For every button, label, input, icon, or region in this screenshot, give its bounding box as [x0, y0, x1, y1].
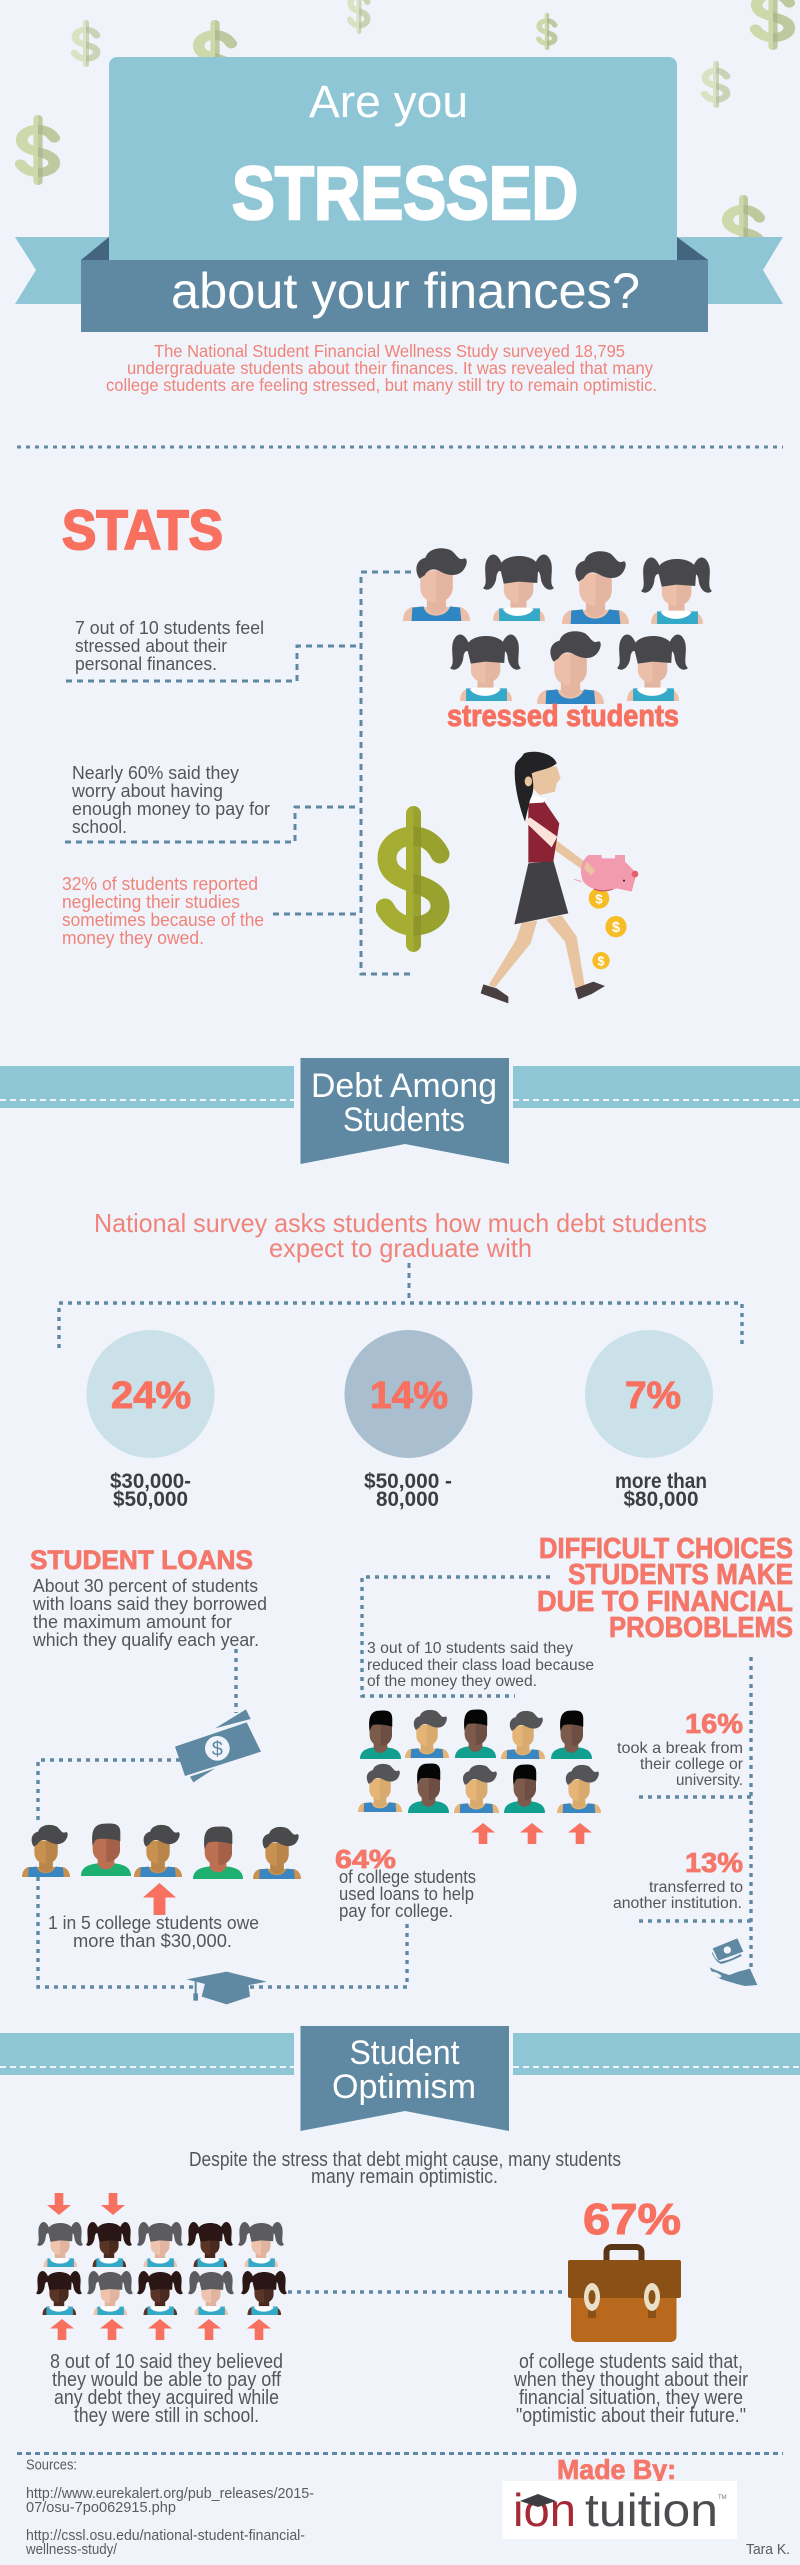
stat: 64%: pay for college.	[339, 1901, 453, 1921]
arrows: class load	[471, 1823, 592, 1844]
skirt	[514, 861, 568, 924]
text: 8 out of 10: any debt they acquired while	[54, 2387, 279, 2409]
stat: 16%: university.	[676, 1772, 743, 1789]
text: 32% neglecting studies: money they owed.	[62, 928, 204, 948]
credit: Tara K.	[746, 2541, 790, 2558]
banner	[300, 2026, 509, 2131]
band left	[0, 2033, 294, 2075]
left fold	[81, 237, 109, 260]
stat: 16%: 16%	[685, 1708, 743, 1739]
text: 32% neglecting studies: 32% of students reported	[62, 874, 258, 894]
text: 32% neglecting studies: sometimes because of the	[62, 910, 264, 930]
text: 3 out of 10	[367, 1640, 594, 1690]
icon: graduation cap	[187, 1972, 267, 2004]
arrows: up	[50, 2319, 271, 2340]
arrows: down	[47, 2193, 125, 2215]
optimism intro: Despite the stress that debt might cause, many students	[189, 2149, 621, 2171]
text: 7 out of 10: personal finances.	[75, 654, 217, 674]
icons: class load students	[358, 1709, 601, 1813]
illustration: girl with piggy bank	[481, 752, 638, 1003]
text: about 30 percent: with loans said they borrowed	[32, 1594, 267, 1614]
logo: iontuition: tuition	[585, 2484, 718, 2536]
icon: big dollar sign	[385, 806, 440, 952]
stat: 14%: 14%	[370, 1375, 448, 1417]
coins: $	[612, 920, 620, 936]
coins: $	[597, 955, 605, 969]
heading: stats: STATS	[62, 498, 223, 561]
text: optimistic about their future	[513, 2351, 748, 2427]
stat: 64%	[335, 1844, 476, 1921]
text: about 30 percent: About 30 percent of students	[33, 1576, 258, 1596]
logo cap	[520, 2494, 556, 2507]
sources: http://www.eurekalert.org/pub_releases/2015-	[26, 2485, 314, 2502]
icons: loan students row	[22, 1824, 301, 1879]
legs	[489, 921, 537, 987]
text: 32% neglecting studies	[62, 874, 264, 948]
stat: 64%: 64%	[335, 1844, 396, 1874]
stat: 13%	[613, 1847, 743, 1912]
banner title: Debt Among	[311, 1067, 497, 1105]
text: optimistic about their future: financial situation, they were	[519, 2387, 743, 2409]
label: stressed students: stressed students	[447, 698, 679, 733]
sleeve	[525, 817, 557, 847]
text: nearly 60%: Nearly 60% said they	[72, 763, 239, 783]
text: 3 out of 10: of the money they owed.	[367, 1673, 537, 1690]
icon: money	[175, 1709, 261, 1782]
hair	[515, 752, 557, 822]
stat: 16%: took a break from	[617, 1740, 743, 1757]
text: optimistic about their future: "optimistic about their future."	[516, 2405, 746, 2427]
section band: debt among students	[0, 1058, 800, 1164]
logo: iontuition	[502, 2481, 737, 2539]
title line 1: Are you	[309, 76, 468, 127]
logo: iontuition: TM	[718, 2495, 727, 2501]
text: 8 out of 10: they would be able to pay off	[52, 2369, 281, 2391]
text: optimistic about their future: of college students said that,	[519, 2351, 743, 2373]
text: 7 out of 10	[75, 618, 264, 674]
title line 3: about your finances?	[171, 263, 640, 319]
text: 8 out of 10: they were still in school.	[74, 2405, 259, 2427]
stat: 64%: used loans to help	[339, 1884, 474, 1904]
section band: student optimism: Optimism	[332, 2068, 476, 2106]
coins: $	[595, 891, 603, 906]
text: nearly 60%	[71, 763, 270, 837]
main title card	[109, 57, 677, 263]
text: 8 out of 10: 8 out of 10 said they believed	[50, 2351, 283, 2373]
banner title: Student	[350, 2034, 460, 2072]
made by: Made By:	[557, 2454, 676, 2485]
survey heading: National survey asks students how much debt students	[94, 1208, 707, 1238]
collar	[528, 795, 546, 803]
text: about 30 percent: the maximum amount for	[33, 1612, 232, 1632]
icon: hand with money	[710, 1938, 757, 1986]
stat: 24%	[86, 1330, 214, 1511]
shirt	[528, 800, 559, 863]
stat: 13%: 13%	[685, 1847, 743, 1878]
optimism intro: many remain optimistic.	[311, 2166, 498, 2188]
stat: 67%: 67%	[583, 2195, 681, 2244]
stat: 7%: 7%	[625, 1375, 681, 1417]
connector: optimism	[288, 2290, 564, 2294]
icon: money: $	[212, 1739, 223, 1761]
intro paragraph	[106, 341, 657, 395]
text: nearly 60%: school.	[72, 817, 127, 837]
stat: 16%: their college or	[640, 1756, 744, 1773]
band right	[513, 1066, 800, 1108]
text: about 30 percent: which they qualify each year.	[32, 1630, 259, 1650]
right ribbon tail	[676, 237, 783, 304]
sources: wellness-study/	[25, 2541, 118, 2558]
banner	[300, 1058, 509, 1164]
heading: difficult choices	[537, 1533, 793, 1644]
intro paragraph: college students are feeling stressed, but many still try to remain optimistic.	[106, 375, 657, 395]
connectors: student loans	[38, 1649, 407, 1987]
face	[530, 767, 561, 795]
ear	[525, 776, 532, 786]
text: 3 out of 10: 3 out of 10 students said they	[367, 1640, 573, 1657]
text: 3 out of 10: reduced their class load because	[367, 1657, 594, 1674]
text: nearly 60%: enough money to pay for	[72, 799, 270, 819]
text: 1 in 5: 1 in 5 college students owe	[48, 1913, 259, 1933]
stat: 14%: $50,000 -	[364, 1470, 452, 1493]
section band: student optimism	[0, 2026, 800, 2131]
text: about 30 percent	[32, 1576, 267, 1650]
logo: iontuition: ion	[513, 2484, 576, 2536]
arm	[551, 839, 595, 875]
text: optimistic about their future: when they thought about their	[513, 2369, 748, 2391]
stat: 24%: $50,000	[113, 1488, 188, 1511]
stat: 16%	[617, 1708, 744, 1789]
survey heading: expect to graduate with	[269, 1233, 532, 1263]
band left	[0, 1066, 294, 1108]
text: 32% neglecting studies: neglecting their studies	[62, 892, 240, 912]
intro paragraph: undergraduate students about their finances. It was revealed that many	[127, 358, 653, 378]
text: 1 in 5	[48, 1913, 259, 1951]
survey heading	[94, 1208, 707, 1263]
stat: 7%: $80,000	[624, 1488, 698, 1511]
title line 2: STRESSED	[232, 151, 578, 235]
stat: 13%: transferred to	[649, 1879, 743, 1896]
sources: http://cssl.osu.edu/national-student-financial-	[26, 2527, 305, 2544]
header banner	[15, 57, 783, 332]
stat: 14%	[344, 1330, 472, 1511]
icons: optimistic students	[36, 2222, 287, 2315]
shoes	[481, 984, 508, 1003]
icons: stressed students	[403, 548, 712, 704]
piggy bank	[574, 855, 638, 892]
optimism intro	[189, 2149, 621, 2188]
intro paragraph: The National Student Financial Wellness Study surveyed 18,795	[154, 341, 625, 361]
dark band	[81, 260, 708, 332]
sources: Sources:	[26, 2456, 77, 2474]
band right	[513, 2033, 800, 2075]
stat: 24%: 24%	[111, 1375, 191, 1417]
right fold	[677, 237, 708, 260]
connectors: survey	[59, 1263, 742, 1348]
stat: 24%: $30,000-	[110, 1470, 191, 1493]
sources	[25, 2456, 314, 2558]
left ribbon tail	[15, 237, 110, 304]
text: nearly 60%: worry about having	[71, 781, 223, 801]
coins	[589, 888, 627, 969]
text: 7 out of 10: stressed about their	[75, 636, 227, 656]
sources: 07/osu-7po062915.php	[26, 2499, 176, 2516]
heading: student loans: STUDENT LOANS	[30, 1545, 253, 1575]
text: 7 out of 10: 7 out of 10 students feel	[75, 618, 264, 638]
background dollar signs	[21, 0, 789, 265]
stat: 7%	[585, 1330, 713, 1511]
text: 1 in 5: more than $30,000.	[73, 1931, 232, 1951]
stat: 7%: more than	[615, 1470, 707, 1493]
stat: 13%: another institution.	[613, 1895, 742, 1912]
arrow: 1 in 5	[143, 1883, 176, 1915]
icon: briefcase	[568, 2247, 681, 2342]
stat: 14%: 80,000	[376, 1488, 439, 1511]
text: 8 out of 10	[50, 2351, 283, 2427]
stat: 64%: of college students	[339, 1867, 476, 1887]
connectors: difficult choices	[362, 1577, 751, 1972]
connectors: stats	[65, 572, 411, 974]
section band: debt among students: Students	[343, 1101, 465, 1139]
